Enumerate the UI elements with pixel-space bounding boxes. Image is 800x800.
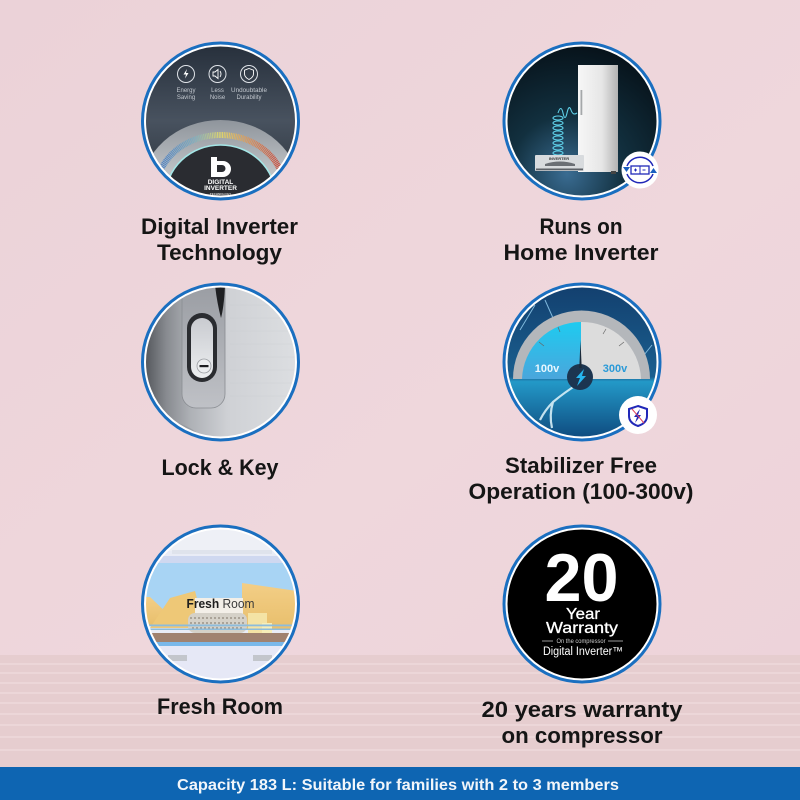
heading: digital inverter technology: Technology (157, 240, 283, 265)
icon: warranty badge (504, 526, 660, 682)
heading: stabilizer free operation: Stabilizer Free (505, 453, 657, 478)
icon: warranty badge: 20 (544, 540, 618, 616)
icon: warranty badge: Warranty (546, 620, 618, 637)
panel: lock and key (142, 284, 298, 480)
heading: stabilizer free operation (468, 453, 694, 504)
heading: fresh room: Fresh Room (157, 694, 283, 719)
inverter box: INVERTER (549, 156, 569, 161)
heading: lock and key: Lock & Key (162, 455, 279, 480)
footer banner: Capacity 183 L: Suitable for families with 2 to 3 members (177, 777, 619, 794)
heading: 20 years warranty: 20 years warranty (482, 697, 683, 722)
heading: 20 years warranty (482, 697, 683, 748)
label: fresh room: Fresh Room (186, 596, 254, 611)
icon: voltage gauge badge (504, 284, 660, 440)
cheese wedges (145, 583, 297, 633)
icon: door lock photo (142, 284, 298, 440)
icon: undoubtable durability: Undoubtable (231, 88, 268, 94)
heading: 20 years warranty: on compressor (502, 723, 663, 748)
icon: energy saving (176, 66, 196, 101)
floor (0, 655, 800, 767)
icon: fresh room shelf photo (142, 526, 298, 682)
icon: inverter dial badge: TECHNOLOGY (210, 192, 231, 196)
gauge: 100v (535, 363, 560, 375)
icon: fridge and inverter badge (504, 43, 660, 199)
lock button (187, 313, 217, 382)
icon: less noise: Noise (210, 95, 226, 101)
icon: shield badge (619, 396, 657, 434)
fridge illustration (578, 65, 618, 174)
panel: fresh room (142, 526, 298, 719)
icon: energy saving: Energy (176, 88, 196, 94)
heading: digital inverter technology: Digital Inverter (141, 214, 298, 239)
icon: less noise (209, 66, 226, 101)
icon: warranty badge: On the compressor (556, 639, 606, 645)
icon: inverter dial badge (141, 42, 300, 200)
wave (553, 108, 577, 155)
icon: inverter dial badge: DIGITAL (208, 179, 233, 186)
icon: battery cycle (622, 152, 658, 188)
icon: less noise: Less (211, 88, 224, 94)
panel: runs on home inverter (504, 43, 660, 265)
panel: stabilizer free operation (468, 284, 694, 504)
panel: 20 years warranty (482, 526, 683, 748)
heading: digital inverter technology (141, 214, 298, 265)
icon: warranty badge: Year (566, 606, 600, 623)
icon: undoubtable durability: Durability (236, 95, 262, 101)
heading: runs on home inverter (504, 214, 659, 265)
icon: undoubtable durability (231, 66, 268, 101)
icon: inverter dial badge: INVERTER (204, 185, 237, 192)
footer banner (0, 767, 800, 800)
heading: runs on home inverter: Home Inverter (504, 240, 659, 265)
lightning (539, 387, 574, 428)
heading: runs on home inverter: Runs on (540, 214, 622, 239)
icon: warranty badge: Digital Inverter™ (543, 646, 623, 658)
icon: energy saving: Saving (177, 95, 195, 101)
panel: digital inverter technology (140, 43, 300, 265)
gauge: 300v (603, 363, 628, 375)
gauge (513, 310, 650, 390)
heading: stabilizer free operation: Operation (100-300v) (468, 479, 694, 504)
